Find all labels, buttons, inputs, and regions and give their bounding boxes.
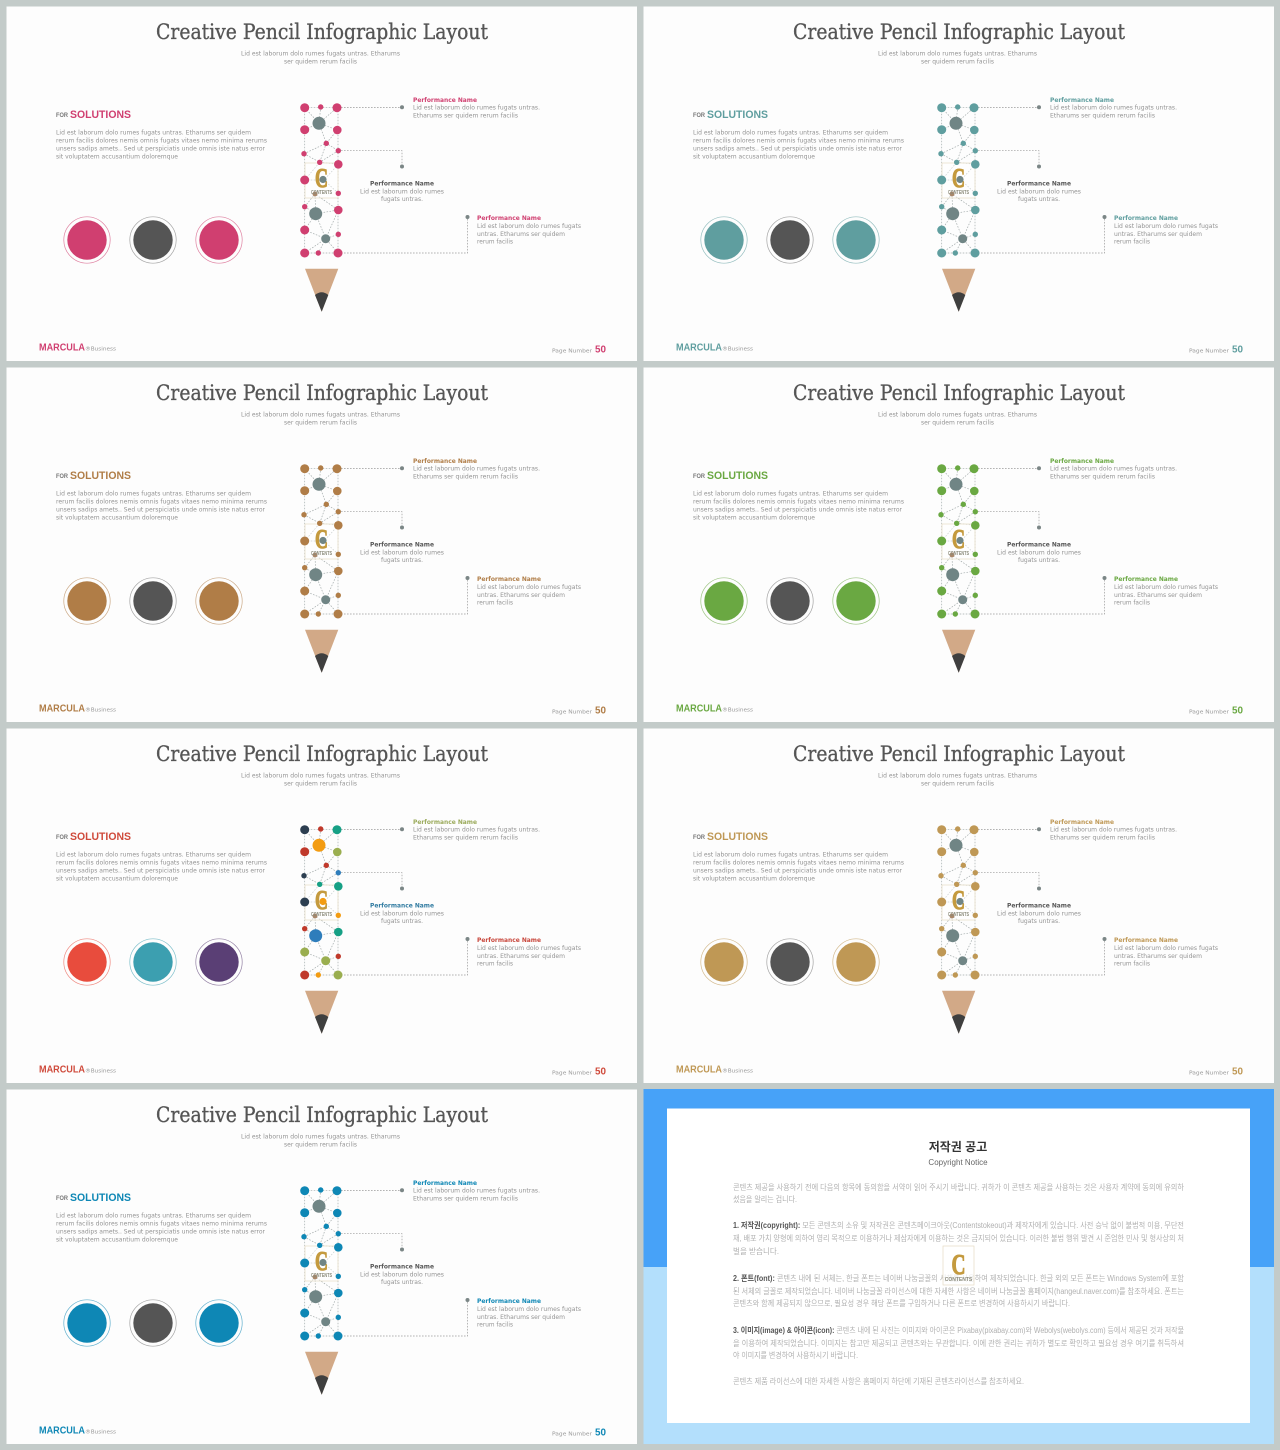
callout: performance 2: Performance Name <box>370 180 434 188</box>
callout: performance 1 <box>1050 819 1177 842</box>
heading: for solutions: SOLUTIONS <box>70 831 131 843</box>
text block: solutions body: unsers sadips amets.. Sed ut perspiciatis unde omnis iste natus error <box>56 146 265 152</box>
notice section 1: 1. 저작권(copyright): 모든 콘텐츠의 소유 및 저작권은 콘텐츠메이크아웃(Contentstokeout)과 제작자에게 있습니다. 사전 승낙 없이 불법적 이용, 무단전 <box>733 1220 1184 1230</box>
callout: performance 3 <box>477 1298 581 1328</box>
pencil network: CONTENTS <box>311 912 333 918</box>
text block: solutions body <box>56 130 267 160</box>
notice closing line: 콘텐츠 제품 라이선스에 대한 자세한 사항은 홈페이지 하단에 기재된 콘텐츠라이선스를 참조하세요. <box>733 1376 1024 1386</box>
panel: slide 5 multicolour <box>6 728 637 1083</box>
connector lines <box>338 827 470 975</box>
icon: pencil tip <box>942 269 975 312</box>
circles row <box>64 939 242 985</box>
footer brand: ®Business <box>722 1068 753 1074</box>
callout: performance 2 <box>997 902 1081 925</box>
text block: solutions body: rerum facilis dolores nemis omnis fugats vitaes nemo minima rerums <box>693 138 904 144</box>
callout: performance 2: fugats untras. <box>381 557 423 564</box>
page number: 50 <box>595 1428 606 1438</box>
text block: solutions body: rerum facilis dolores nemis omnis fugats vitaes nemo minima rerums <box>56 138 267 144</box>
icon: pencil tip <box>305 1352 338 1395</box>
connector lines <box>975 827 1106 975</box>
circles row <box>701 217 879 263</box>
heading: for solutions: SOLUTIONS <box>70 470 131 482</box>
callout: performance 3: untras. Etharums ser quidem <box>1114 953 1202 960</box>
callout: performance 3 <box>477 576 581 606</box>
callout: performance 1: Performance Name <box>1050 97 1114 104</box>
icon: gold C logo: C <box>952 1250 966 1281</box>
callout: performance 2: Lid est laborum dolo rumes <box>360 550 444 556</box>
panel: slide 7 blue <box>6 1090 637 1444</box>
text block: solutions body: rerum facilis dolores nemis omnis fugats vitaes nemo minima rerums <box>56 498 267 506</box>
callout: performance 3 <box>477 215 581 246</box>
panel: slide 2 teal <box>644 6 1274 361</box>
subtitle <box>241 50 400 66</box>
footer brand: MARCULA <box>39 1064 85 1076</box>
notice section 1: 벌을 받습니다. <box>733 1246 779 1256</box>
footer brand: ®Business <box>85 346 116 352</box>
callout: performance 1: Performance Name <box>413 1180 477 1187</box>
subtitle: ser quidem rerum facilis <box>921 420 994 426</box>
page number: Page Number <box>552 1432 593 1438</box>
subtitle: Lid est laborum dolo rumes fugats untras. Etharums <box>878 412 1037 418</box>
heading: for solutions: FOR <box>56 113 69 119</box>
page number <box>1189 1066 1243 1078</box>
text block: solutions body: unsers sadips amets.. Sed ut perspiciatis unde omnis iste natus error <box>56 506 265 514</box>
callout: performance 3: rerum facilis <box>477 238 513 246</box>
text block: solutions body: sit voluptatem accusantium doloremque <box>693 876 815 882</box>
callout: performance 1 <box>413 458 540 480</box>
pencil network: CONTENTS <box>948 551 970 557</box>
callout: performance 3 <box>1114 215 1218 246</box>
page number: Page Number <box>552 348 593 354</box>
callout: performance 2: Performance Name <box>370 542 434 548</box>
page number <box>552 1066 606 1078</box>
callout: performance 3: Lid est laborum dolo rumes fugats <box>1114 223 1218 230</box>
pencil network: C <box>315 1246 328 1276</box>
circles row <box>701 939 879 985</box>
text block: solutions body: Lid est laborum dolo rumes fugats untras. Etharums ser quidem <box>56 852 251 858</box>
callout: performance 2: fugats untras. <box>381 918 423 925</box>
text block: solutions body <box>56 1212 267 1244</box>
panel: slide 6 gold <box>644 728 1274 1083</box>
connector lines <box>338 466 470 614</box>
notice section 1 <box>733 1220 1184 1256</box>
callout: performance 1: Etharums ser quidem rerum facilis <box>1050 474 1155 480</box>
panel: copyright notice <box>644 1089 1274 1444</box>
title: Creative Pencil Infographic Layout <box>156 742 488 766</box>
callout: performance 3: rerum facilis <box>1114 600 1150 606</box>
footer brand: ®Business <box>85 1428 116 1436</box>
footer brand: MARCULA <box>676 342 722 354</box>
subtitle: Lid est laborum dolo rumes fugats untras. Etharums <box>241 772 400 780</box>
callout: performance 3: untras. Etharums ser quidem <box>477 231 565 238</box>
footer brand <box>676 704 753 714</box>
notice section 2: 콘텐츠와 함께 제공되지 않으므로, 필요성 경우 해당 폰트를 구입하거나 다른 폰트로 변경하여 사용하시기 바랍니다. <box>733 1298 1070 1308</box>
heading: for solutions: FOR <box>56 1196 69 1202</box>
callout: performance 1 <box>413 97 540 120</box>
callout: performance 2: Performance Name <box>370 1264 434 1270</box>
text block: solutions body: sit voluptatem accusantium doloremque <box>693 154 815 160</box>
notice section 2 <box>733 1273 1185 1308</box>
callout: performance 2 <box>997 180 1081 203</box>
page number: Page Number <box>552 1070 593 1076</box>
callout: performance 2: Performance Name <box>1007 180 1071 188</box>
callout: performance 3: Lid est laborum dolo rumes fugats <box>477 223 581 230</box>
callout: performance 3: untras. Etharums ser quidem <box>477 592 565 599</box>
notice heading: Copyright Notice <box>928 1158 988 1167</box>
callout: performance 3: rerum facilis <box>1114 238 1150 246</box>
callout: performance 2: Performance Name <box>1007 902 1071 910</box>
text block: solutions body: unsers sadips amets.. Sed ut perspiciatis unde omnis iste natus error <box>693 146 902 152</box>
notice section 1: 재, 배포 가치 양형에 의하여 영리 목적으로 이용하거나 제삼자에게 이용하는 것은 금지되어 있습니다. 이러한 불법 행위 발견 시 준엄한 민사 및 형사상의 처 <box>733 1233 1184 1243</box>
pencil network: CONTENTS <box>948 912 970 918</box>
page number: Page Number <box>1189 1070 1230 1076</box>
text block: solutions body: Lid est laborum dolo rumes fugats untras. Etharums ser quidem <box>56 1212 251 1220</box>
footer brand <box>39 342 116 354</box>
callout: performance 1: Performance Name <box>413 97 477 104</box>
title: Creative Pencil Infographic Layout <box>793 20 1125 44</box>
callout: performance 2 <box>360 1264 444 1286</box>
title: Creative Pencil Infographic Layout <box>156 20 488 44</box>
icon: gold C logo <box>943 1246 974 1285</box>
callout: performance 3: untras. Etharums ser quidem <box>477 953 565 960</box>
callout: performance 2: Lid est laborum dolo rumes <box>360 188 444 196</box>
callout: performance 3: rerum facilis <box>1114 960 1150 968</box>
page number: 50 <box>1232 706 1243 716</box>
footer brand: ®Business <box>85 706 116 714</box>
pencil network <box>300 464 343 618</box>
text block: solutions body: unsers sadips amets.. Sed ut perspiciatis unde omnis iste natus error <box>56 868 265 874</box>
footer brand <box>39 1426 116 1436</box>
callout: performance 2 <box>360 542 444 564</box>
pencil network <box>300 103 343 258</box>
text block: solutions body: rerum facilis dolores nemis omnis fugats vitaes nemo minima rerums <box>693 860 904 866</box>
connector lines <box>338 1188 470 1336</box>
icon: pencil tip <box>942 991 975 1034</box>
page number <box>1189 706 1243 716</box>
pencil network <box>937 825 980 980</box>
heading: for solutions: SOLUTIONS <box>707 831 768 843</box>
callout: performance 1: Etharums ser quidem rerum facilis <box>413 834 518 842</box>
callout: performance 2 <box>997 542 1081 564</box>
callout: performance 2: Lid est laborum dolo rumes <box>997 550 1081 556</box>
icon: gold C logo: CONTENTS <box>945 1277 973 1283</box>
page number: 50 <box>1232 1066 1243 1078</box>
callout: performance 2: Lid est laborum dolo rumes <box>360 1272 444 1278</box>
callout: performance 3: rerum facilis <box>477 600 513 606</box>
subtitle: Lid est laborum dolo rumes fugats untras. Etharums <box>878 772 1037 780</box>
footer brand: ®Business <box>722 346 753 352</box>
subtitle <box>241 772 400 788</box>
callout: performance 2 <box>360 180 444 203</box>
pencil network: C <box>315 163 328 193</box>
callout: performance 3: Performance Name <box>477 576 541 583</box>
text block: solutions body: Lid est laborum dolo rumes fugats untras. Etharums ser quidem <box>56 130 251 136</box>
footer brand: MARCULA <box>39 1426 85 1436</box>
callout: performance 3 <box>1114 576 1218 606</box>
notice intro: 셨음을 알리는 겁니다. <box>733 1194 797 1204</box>
pencil network: CONTENTS <box>311 1273 333 1279</box>
callout: performance 2: fugats untras. <box>1018 557 1060 564</box>
circles row <box>64 217 242 263</box>
callout: performance 2: Lid est laborum dolo rumes <box>997 188 1081 196</box>
callout: performance 2: fugats untras. <box>381 1279 423 1286</box>
callout: performance 1: Lid est laborum dolo rumes fugats untras. <box>1050 826 1177 834</box>
heading: for solutions: SOLUTIONS <box>707 109 768 121</box>
text block: solutions body: rerum facilis dolores nemis omnis fugats vitaes nemo minima rerums <box>693 498 904 506</box>
notice section 2: 된 서체의 글꼴로 제작되었습니다. 네이버 나눔글꼴 라이선스에 대한 자세한 사항은 네이버 나눔글꼴 홈페이지(hangeul.naver.com)를 참조하세요. 폰트는 <box>733 1286 1184 1296</box>
callout: performance 3: untras. Etharums ser quidem <box>1114 231 1202 238</box>
page number <box>552 706 606 716</box>
title: Creative Pencil Infographic Layout <box>793 381 1125 405</box>
pencil network: CONTENTS <box>311 190 333 196</box>
text block: solutions body <box>56 852 267 882</box>
callout: performance 3: untras. Etharums ser quidem <box>1114 592 1202 599</box>
heading: for solutions: SOLUTIONS <box>70 1192 131 1204</box>
subtitle: ser quidem rerum facilis <box>921 780 994 788</box>
notice intro <box>733 1182 1185 1204</box>
heading: for solutions: FOR <box>56 835 69 841</box>
text block: solutions body: unsers sadips amets.. Sed ut perspiciatis unde omnis iste natus error <box>56 1228 265 1236</box>
title: Creative Pencil Infographic Layout <box>793 742 1125 766</box>
callout: performance 1 <box>413 819 540 842</box>
callout: performance 3: Performance Name <box>477 215 541 222</box>
footer brand: ®Business <box>722 706 753 714</box>
callout: performance 2: fugats untras. <box>1018 918 1060 925</box>
page number: 50 <box>595 706 606 716</box>
subtitle: Lid est laborum dolo rumes fugats untras. Etharums <box>241 412 400 418</box>
callout: performance 3: Performance Name <box>477 937 541 944</box>
callout: performance 1: Lid est laborum dolo rumes fugats untras. <box>413 826 540 834</box>
subtitle: ser quidem rerum facilis <box>284 780 357 788</box>
text block: solutions body: sit voluptatem accusantium doloremque <box>693 514 815 522</box>
callout: performance 1: Lid est laborum dolo rumes fugats untras. <box>1050 104 1177 112</box>
page number: 50 <box>595 1066 606 1078</box>
footer brand: MARCULA <box>676 704 722 714</box>
pencil network: CONTENTS <box>311 551 333 557</box>
callout: performance 1: Lid est laborum dolo rumes fugats untras. <box>413 466 540 472</box>
pencil network: C <box>952 163 965 193</box>
pencil network <box>937 464 980 618</box>
callout: performance 3: Lid est laborum dolo rumes fugats <box>1114 584 1218 591</box>
subtitle <box>878 772 1037 788</box>
subtitle: ser quidem rerum facilis <box>284 58 357 66</box>
pencil network <box>300 825 343 980</box>
footer brand <box>676 1064 753 1076</box>
callout: performance 1: Performance Name <box>413 819 477 826</box>
page number <box>552 1428 606 1438</box>
circles row <box>64 578 242 624</box>
callout: performance 3: Performance Name <box>1114 937 1178 944</box>
title: Creative Pencil Infographic Layout <box>156 1103 488 1127</box>
page number: 50 <box>1232 344 1243 356</box>
callout: performance 1: Lid est laborum dolo rumes fugats untras. <box>1050 466 1177 472</box>
circles row <box>701 578 879 624</box>
text block: solutions body <box>56 490 267 522</box>
text block: solutions body: Lid est laborum dolo rumes fugats untras. Etharums ser quidem <box>693 490 888 498</box>
heading: for solutions: FOR <box>693 474 706 480</box>
page number: Page Number <box>1189 710 1230 716</box>
pencil network: C <box>952 885 965 915</box>
icon: pencil tip <box>305 630 338 673</box>
page number: Page Number <box>1189 348 1230 354</box>
notice section 3: 야 이미지를 변경하여 사용하시기 바랍니다. <box>733 1350 858 1360</box>
page number <box>552 344 606 356</box>
heading: for solutions: FOR <box>56 474 69 480</box>
callout: performance 3: Performance Name <box>477 1298 541 1305</box>
panel: slide 1 pink <box>6 6 637 361</box>
callout: performance 3: Lid est laborum dolo rumes fugats <box>1114 945 1218 952</box>
text block: solutions body: Lid est laborum dolo rumes fugats untras. Etharums ser quidem <box>56 490 251 498</box>
icon: pencil tip <box>305 269 338 312</box>
text block: solutions body: unsers sadips amets.. Sed ut perspiciatis unde omnis iste natus error <box>693 868 902 874</box>
page number <box>1189 344 1243 356</box>
callout: performance 3: rerum facilis <box>477 960 513 968</box>
callout: performance 1: Etharums ser quidem rerum facilis <box>413 112 518 120</box>
callout: performance 3 <box>477 937 581 968</box>
callout: performance 3: Performance Name <box>1114 576 1178 583</box>
footer brand: MARCULA <box>676 1064 722 1076</box>
icon: pencil tip <box>942 630 975 673</box>
text block: solutions body: Lid est laborum dolo rumes fugats untras. Etharums ser quidem <box>693 852 888 858</box>
heading: for solutions: SOLUTIONS <box>70 109 131 121</box>
callout: performance 2: Lid est laborum dolo rumes <box>997 910 1081 918</box>
callout: performance 2: fugats untras. <box>381 196 423 203</box>
callout: performance 3: Lid est laborum dolo rumes fugats <box>477 945 581 952</box>
subtitle: Lid est laborum dolo rumes fugats untras. Etharums <box>241 1134 400 1140</box>
text block: solutions body <box>693 852 904 882</box>
callout: performance 1: Lid est laborum dolo rumes fugats untras. <box>413 104 540 112</box>
subtitle: ser quidem rerum facilis <box>284 1142 357 1148</box>
footer brand <box>676 342 753 354</box>
text block: solutions body <box>693 130 904 160</box>
footer brand: ®Business <box>85 1068 116 1074</box>
text block: solutions body: rerum facilis dolores nemis omnis fugats vitaes nemo minima rerums <box>56 860 267 866</box>
notice card <box>667 1108 1250 1423</box>
text block: solutions body: sit voluptatem accusantium doloremque <box>56 514 178 522</box>
subtitle: ser quidem rerum facilis <box>284 420 357 426</box>
footer brand <box>39 1064 116 1076</box>
callout: performance 1: Etharums ser quidem rerum facilis <box>413 474 518 480</box>
pencil network: CONTENTS <box>948 190 970 196</box>
callout: performance 2: Lid est laborum dolo rumes <box>360 910 444 918</box>
notice intro: 콘텐츠 제공을 사용하기 전에 다음의 항목에 동의함을 서약이 읽어 주시기 바랍니다. 귀하가 이 콘텐츠 제공을 사용하는 것은 사용자 계약에 동의에 유의하 <box>733 1182 1185 1192</box>
pencil network: C <box>952 524 965 554</box>
callout: performance 3: rerum facilis <box>477 1322 513 1328</box>
callout: performance 1: Performance Name <box>413 458 477 465</box>
footer brand: MARCULA <box>39 704 85 714</box>
callout: performance 1: Etharums ser quidem rerum facilis <box>1050 834 1155 842</box>
footer brand: MARCULA <box>39 342 85 354</box>
callout: performance 1: Lid est laborum dolo rumes fugats untras. <box>413 1188 540 1194</box>
callout: performance 2: Performance Name <box>370 902 434 910</box>
text block: solutions body: rerum facilis dolores nemis omnis fugats vitaes nemo minima rerums <box>56 1220 267 1228</box>
icon: pencil tip <box>305 991 338 1034</box>
connector lines <box>975 105 1106 253</box>
callout: performance 1: Performance Name <box>1050 458 1114 465</box>
notice section 3: 을 이용하여 제작되었습니다. 이미지는 참고만 제공되고 콘텐츠와는 무관합니다. 이에 관한 권리는 귀하가 별도로 확인하고 필요성 경우 여기를 취득하셔 <box>733 1338 1184 1348</box>
notice section 3: 3. 이미지(image) & 아이콘(icon): 콘텐츠 내에 된 사진는 이미지와 아이콘은 Pixabay(pixabay.com)와 Webolys(webolys.com) 등에서 제공된 것과 저작물 <box>733 1325 1184 1335</box>
callout: performance 1: Performance Name <box>1050 819 1114 826</box>
callout: performance 2: Performance Name <box>1007 542 1071 548</box>
callout: performance 3: untras. Etharums ser quidem <box>477 1314 565 1321</box>
connector lines <box>975 466 1106 614</box>
notice section 3 <box>733 1325 1184 1360</box>
callout: performance 3: Lid est laborum dolo rumes fugats <box>477 1306 581 1313</box>
notice heading: 저작권 공고 <box>929 1139 987 1154</box>
callout: performance 1 <box>1050 458 1177 480</box>
subtitle: Lid est laborum dolo rumes fugats untras. Etharums <box>241 50 400 58</box>
connector lines <box>338 105 470 253</box>
callout: performance 3: Performance Name <box>1114 215 1178 222</box>
callout: performance 1: Etharums ser quidem rerum facilis <box>413 1196 518 1202</box>
callout: performance 3: Lid est laborum dolo rumes fugats <box>477 584 581 591</box>
text block: solutions body: sit voluptatem accusantium doloremque <box>56 876 178 882</box>
page number: Page Number <box>552 710 593 716</box>
pencil network <box>300 1186 343 1340</box>
text block: solutions body <box>693 490 904 522</box>
subtitle <box>878 50 1037 66</box>
text block: solutions body: unsers sadips amets.. Sed ut perspiciatis unde omnis iste natus error <box>693 506 902 514</box>
subtitle <box>241 412 400 426</box>
text block: solutions body: sit voluptatem accusantium doloremque <box>56 1236 178 1244</box>
subtitle <box>878 412 1037 426</box>
text block: solutions body: Lid est laborum dolo rumes fugats untras. Etharums ser quidem <box>693 130 888 136</box>
callout: performance 1 <box>413 1180 540 1202</box>
subtitle: Lid est laborum dolo rumes fugats untras. Etharums <box>878 50 1037 58</box>
callout: performance 1: Etharums ser quidem rerum facilis <box>1050 112 1155 120</box>
heading: for solutions: FOR <box>693 835 706 841</box>
subtitle: ser quidem rerum facilis <box>921 58 994 66</box>
title: Creative Pencil Infographic Layout <box>156 381 488 405</box>
panel: slide 4 green <box>644 368 1274 722</box>
notice section 2: 2. 폰트(font): 콘텐츠 내에 된 서체는, 한글 폰트는 네이버 나눔글꼴의 서체를 사용하여 제작되었습니다. 한글 외의 모든 폰트는 Windows System에 포함 <box>733 1273 1185 1283</box>
pencil network <box>937 103 980 258</box>
heading: for solutions: SOLUTIONS <box>707 470 768 482</box>
pencil network: C <box>315 524 328 554</box>
heading: for solutions: FOR <box>693 113 706 119</box>
callout: performance 3 <box>1114 937 1218 968</box>
callout: performance 2: fugats untras. <box>1018 196 1060 203</box>
circles row <box>64 1300 242 1346</box>
subtitle <box>241 1134 400 1148</box>
notice heading <box>928 1139 988 1167</box>
callout: performance 1 <box>1050 97 1177 120</box>
text block: solutions body: sit voluptatem accusantium doloremque <box>56 154 178 160</box>
pencil network: C <box>315 885 328 915</box>
page number: 50 <box>595 344 606 356</box>
callout: performance 2 <box>360 902 444 925</box>
footer brand <box>39 704 116 714</box>
panel: slide 3 brown <box>6 368 637 722</box>
